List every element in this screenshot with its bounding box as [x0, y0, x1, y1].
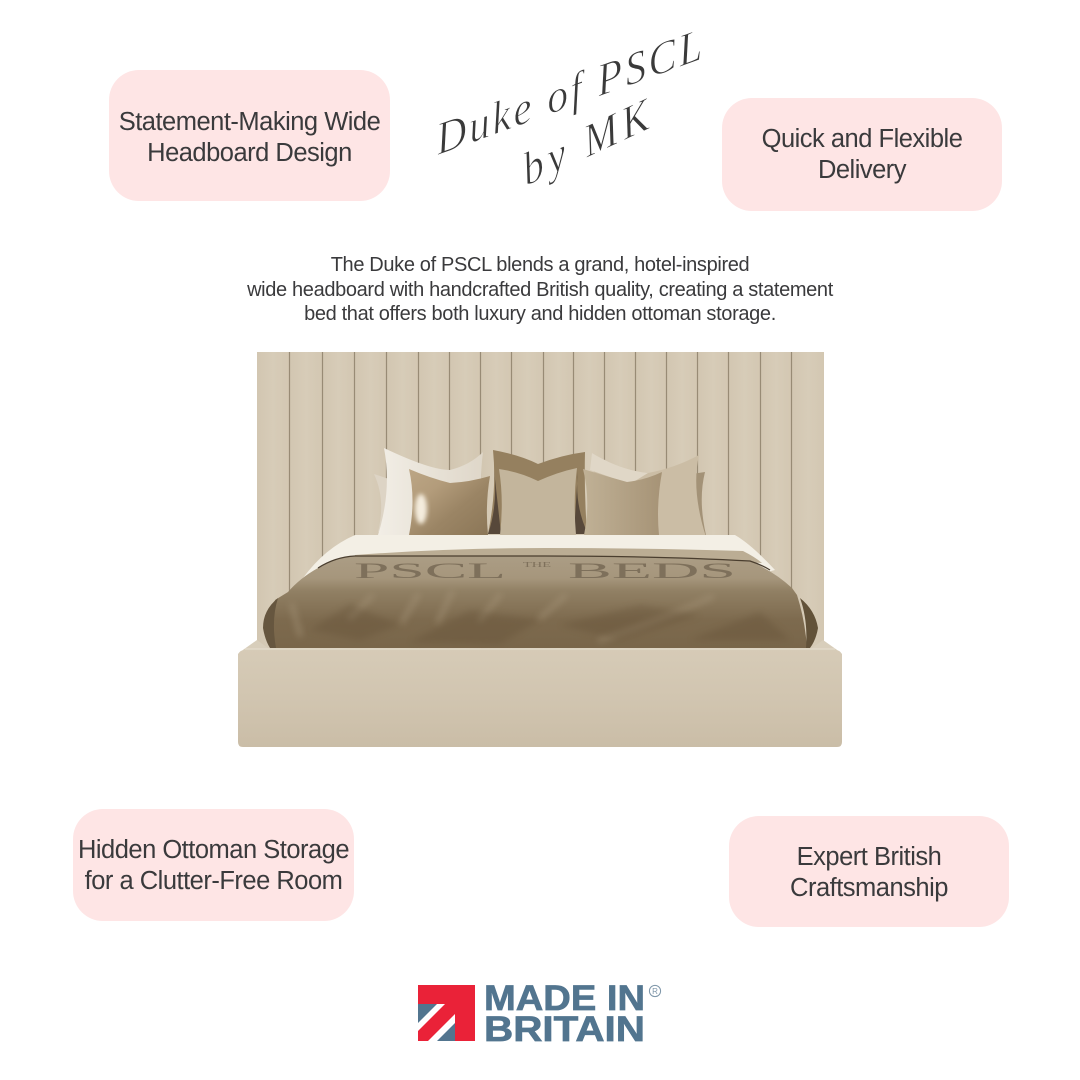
logo registered mark: R — [652, 987, 658, 996]
headboard — [257, 352, 824, 650]
pillow: large cream right — [590, 453, 706, 537]
callout: hidden ottoman storage: for a Clutter-Free Room — [85, 867, 342, 895]
side flap left — [263, 598, 278, 648]
satin duvet and runner — [263, 556, 818, 648]
bed base — [238, 640, 842, 747]
pillow: small back right — [685, 472, 706, 535]
callout: statement-making wide headboard design — [109, 70, 390, 201]
intro text: bed that offers both luxury and hidden ottoman storage. — [304, 303, 776, 325]
callout: expert British craftsmanship: Craftsmanship — [790, 874, 948, 902]
pillows — [374, 448, 706, 537]
logo mark — [418, 985, 475, 1041]
satin folds: highlights — [292, 592, 712, 640]
callout: expert British craftsmanship: Expert British — [797, 842, 941, 870]
logo wordmark: MADE IN — [484, 979, 645, 1018]
logo wordmark: BRITAIN — [484, 1010, 645, 1049]
intro text — [247, 254, 834, 325]
pillow: centre front — [499, 468, 577, 535]
white sheet — [303, 535, 775, 578]
logo registered mark — [649, 985, 661, 997]
side flap right — [800, 598, 818, 648]
callout: hidden ottoman storage: Hidden Ottoman Storage — [78, 836, 349, 864]
callout: statement-making wide headboard design: Headboard Design — [147, 138, 352, 166]
sheet fold band — [355, 548, 762, 563]
callout: quick and flexible delivery — [722, 98, 1002, 211]
signature title: by MK — [518, 87, 655, 196]
pillow: tan right front — [583, 469, 662, 535]
satin folds: shadows — [310, 604, 790, 644]
signature title: Duke of PSCL — [433, 18, 704, 165]
runner lettering: BEDS — [568, 558, 736, 583]
callout: quick and flexible delivery: Delivery — [818, 156, 906, 184]
runner lettering — [354, 558, 736, 583]
callout: statement-making wide headboard design: Statement-Making Wide — [119, 108, 380, 136]
callout: quick and flexible delivery: Quick and Flexible — [762, 124, 962, 152]
logo wordmark — [484, 979, 645, 1049]
callout: hidden ottoman storage — [73, 809, 354, 921]
runner lettering: THE — [523, 561, 551, 569]
pillow: satin left — [409, 469, 490, 535]
pillow: brown centre back — [488, 450, 588, 534]
pillow: large white left — [378, 448, 486, 535]
pillow: small back left — [374, 474, 392, 532]
intro text: The Duke of PSCL blends a grand, hotel-inspired — [331, 254, 749, 276]
runner lettering: PSCL — [354, 558, 506, 583]
intro text: wide headboard with handcrafted British quality, creating a statement — [247, 278, 833, 300]
callout: expert British craftsmanship — [729, 816, 1009, 927]
